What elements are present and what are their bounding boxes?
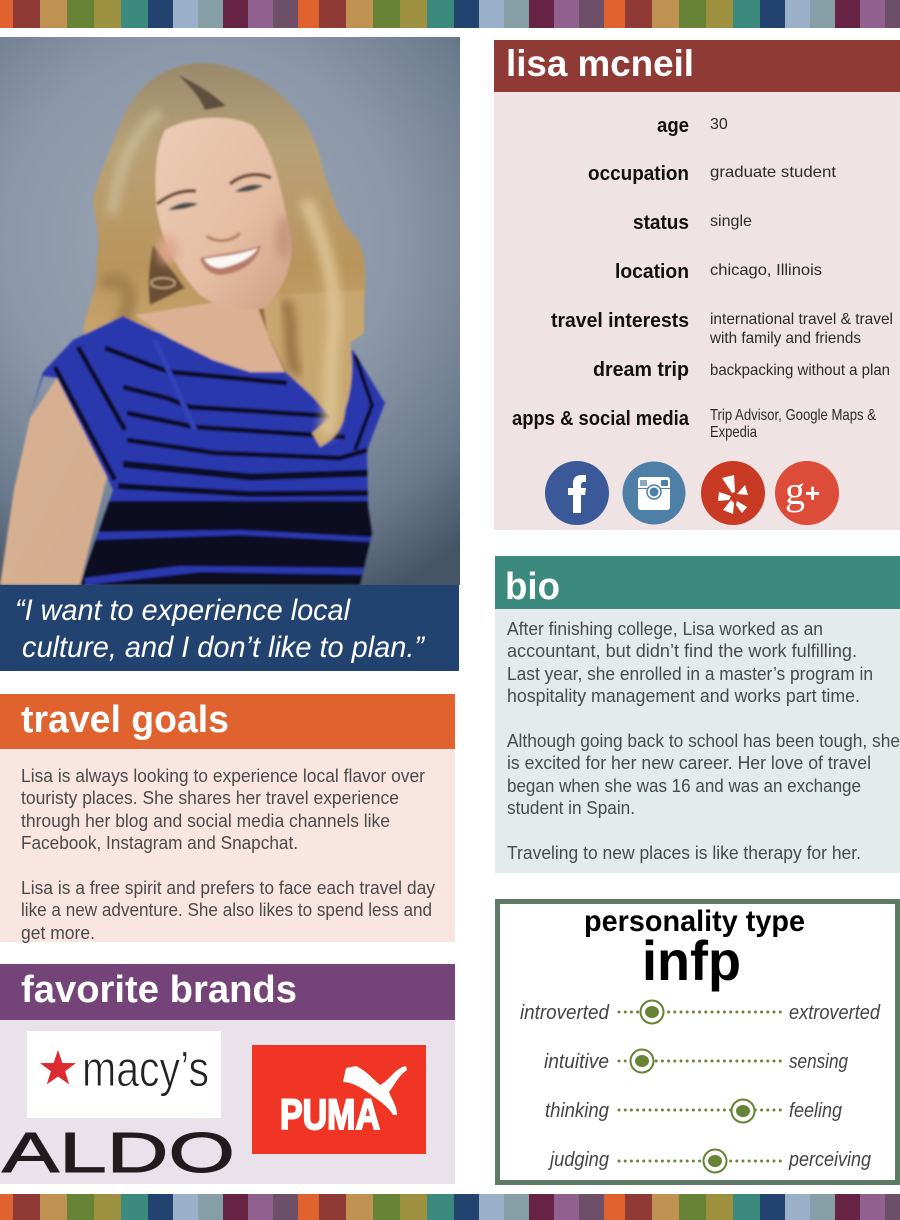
front lock of hair [262,290,364,447]
profile values: 30 [710,116,728,133]
icon: google plus [775,461,839,525]
travel goals text: Lisa is always looking to experience local flavor over [21,766,425,786]
quote text: “I want to experience local [15,594,351,627]
scale: judging to perceiving: judging [547,1149,609,1171]
bottom colour strip [0,1194,900,1220]
profile values: with family and friends [709,330,861,347]
icon: google plus: g [785,468,805,513]
profile labels: dream trip [593,359,689,381]
profile labels: apps & social media [512,408,690,430]
travel goals text: Facebook, Instagram and Snapchat. [21,833,298,853]
type: infp: infp [642,929,741,992]
quote text: culture, and I don’t like to plan.” [22,631,426,664]
scale: judging to perceiving [547,1149,871,1172]
shirt [30,316,385,585]
face [156,118,291,310]
logo: macy's: macy’s [82,1041,209,1097]
panel: personality type [498,902,898,1182]
scale: intuitive to sensing [544,1050,848,1073]
scale: introverted to extroverted [520,1000,881,1024]
travel goals text: through her blog and social media channels like [21,811,390,831]
heading: travel goals: travel goals [21,699,229,741]
profile labels: occupation [588,163,689,185]
bio text: Traveling to new places is like therapy for her. [507,843,861,863]
top colour strip [0,0,900,28]
scale: judging to perceiving: perceiving [788,1149,871,1171]
logo: puma [252,1045,426,1154]
profile values [709,116,893,441]
icon: instagram [622,462,686,524]
panel: bio [495,556,900,873]
travel goals text: like a new adventure. She also likes to spend less and [21,900,432,920]
profile values: chicago, Illinois [710,262,822,279]
bio text: is excited for her new career. Her love of travel [507,753,871,773]
icon: yelp [701,461,765,525]
heading: bio: bio [505,566,560,608]
profile values: graduate student [710,164,837,181]
bio text: student in Spain. [507,798,635,818]
logo: macy's [27,1031,221,1118]
profile values: single [710,213,752,230]
bio text: Last year, she enrolled in a master’s program in [507,664,873,684]
bio text: hospitality management and works part time. [507,686,860,706]
heading: personality type: personality type [584,905,805,938]
travel goals text: Lisa is a free spirit and prefers to face each travel day [21,878,435,898]
profile values: Expedia [710,424,757,441]
profile values: international travel & travel [710,311,893,328]
quote panel [0,585,459,671]
travel goals text: get more. [21,923,95,943]
scale: thinking to feeling: feeling [789,1100,842,1122]
profile labels: status [633,212,689,234]
logo: aldo: ALDO [2,1121,235,1185]
scale: thinking to feeling [545,1100,842,1122]
logo: puma: PUMA [280,1091,380,1139]
arm [0,378,107,585]
heading: favorite brands: favorite brands [21,969,297,1011]
neck [135,295,290,373]
travel goals text: touristy places. She shares her travel experience [21,788,399,808]
profile labels: travel interests [551,310,689,332]
icon: google plus: + [805,478,820,508]
bio text: began when she was 16 and was an exchange [507,776,861,796]
scale: introverted to extroverted: introverted [520,1002,610,1024]
panel: travel goals [0,694,455,943]
heading: lisa mcneil: lisa mcneil [506,43,694,84]
scale: introverted to extroverted: extroverted [789,1002,881,1024]
panel: profile [494,40,900,530]
scale: thinking to feeling: thinking [545,1100,609,1122]
bio text: accountant, but didn’t find the work fulfilling. [507,641,857,661]
photo: portrait of Lisa [0,37,460,591]
scale: intuitive to sensing: intuitive [544,1051,609,1073]
bio text: After finishing college, Lisa worked as an [507,619,823,639]
icon: facebook [545,461,609,525]
panel: favorite brands [0,964,455,1185]
profile labels [512,115,690,430]
profile labels: age [657,115,689,137]
profile labels: location [615,261,689,283]
scale: intuitive to sensing: sensing [789,1051,848,1073]
profile values: backpacking without a plan [710,362,890,379]
